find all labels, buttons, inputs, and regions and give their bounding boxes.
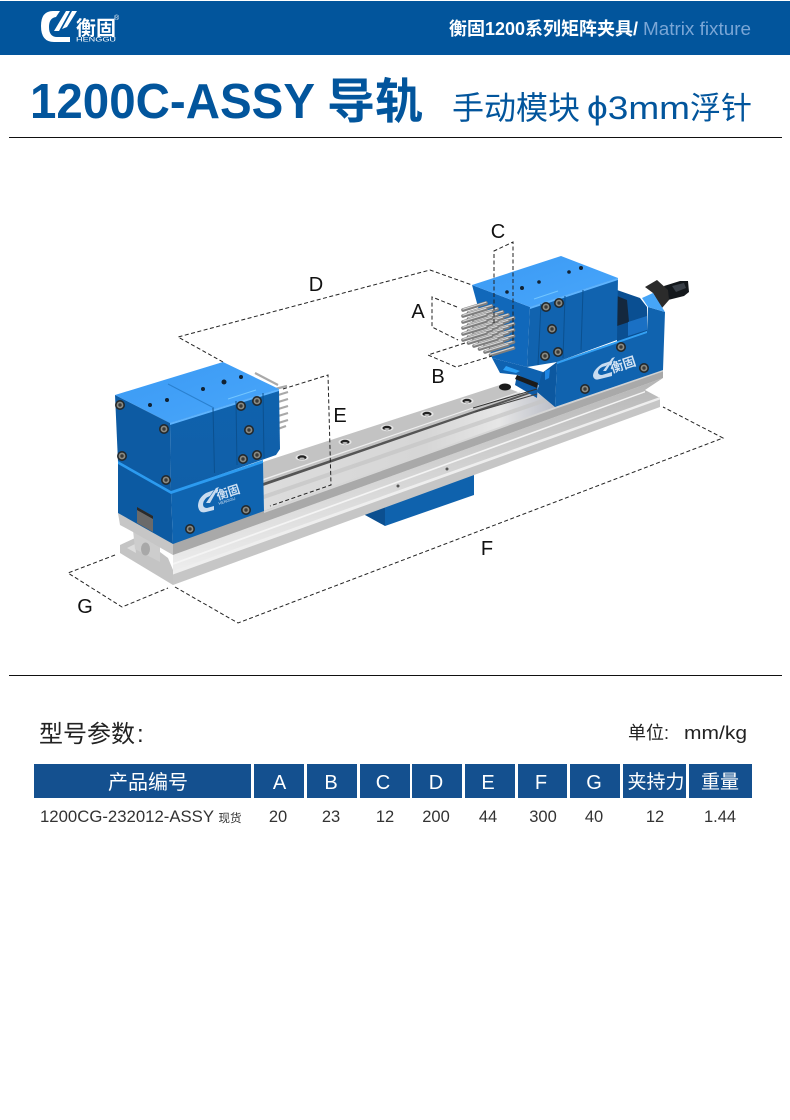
bottom blue bracket <box>365 470 474 526</box>
table header labels: G <box>586 772 602 794</box>
dimension labels: B <box>431 366 445 388</box>
table data row: 12 <box>646 808 664 826</box>
subtitle: 浮针 <box>690 91 752 126</box>
right clamp module <box>472 256 689 412</box>
unit note: 单位: <box>628 723 669 743</box>
dimension B <box>428 343 492 367</box>
table data row: 23 <box>322 808 340 826</box>
logo: HENGGU <box>76 36 116 44</box>
table header labels: D <box>429 772 443 794</box>
product diagram: rail and two clamp modules <box>115 256 689 585</box>
right module connector <box>645 280 689 308</box>
subtitle: ϕ3mm <box>587 90 690 126</box>
subtitle <box>452 90 752 126</box>
dimension labels: G <box>77 596 93 618</box>
subtitle: 手动模块 <box>452 90 580 126</box>
table data row: 12 <box>376 808 394 826</box>
right module logo: 衡固 <box>608 354 638 376</box>
table header labels <box>108 771 739 794</box>
section heading: 型号参数: <box>39 721 144 748</box>
right module slider <box>515 375 538 398</box>
title: 1200C-ASSY <box>30 75 315 129</box>
left module pins <box>255 373 288 430</box>
table data row <box>40 808 736 826</box>
pin matrix <box>463 302 514 355</box>
header english caption: Matrix fixture <box>643 19 751 39</box>
table header labels: E <box>481 772 495 794</box>
table header labels: F <box>535 772 547 794</box>
rail holes <box>296 398 474 461</box>
extrusion end face <box>120 538 173 585</box>
parameter table <box>34 764 752 826</box>
header band <box>0 1 790 55</box>
right module lower block <box>537 362 557 407</box>
table header labels: A <box>273 772 287 794</box>
right module logo <box>593 354 638 380</box>
title: 导轨 <box>327 76 423 129</box>
dimension F <box>175 407 723 623</box>
table data row: 1200CG-232012-ASSY <box>40 808 214 826</box>
left module logo: 衡固 <box>214 481 242 503</box>
right module rear wall <box>617 290 647 342</box>
table header <box>34 764 752 798</box>
table header labels: 重量 <box>701 771 739 793</box>
right module under body <box>492 358 543 386</box>
unit note: mm/kg <box>684 723 747 743</box>
left clamp module <box>115 362 288 544</box>
dimension labels: E <box>333 405 347 427</box>
table data row: 200 <box>422 808 450 826</box>
table header labels: 产品编号 <box>108 771 188 794</box>
base extrusion <box>120 378 663 585</box>
table header labels: C <box>376 772 390 794</box>
dimension D <box>178 270 472 362</box>
logo: 衡固 <box>76 17 116 40</box>
dimension labels: D <box>309 274 323 296</box>
table data row: 1.44 <box>704 808 736 826</box>
dimension G <box>68 555 168 607</box>
table data row: 40 <box>585 808 603 826</box>
logo: ® <box>114 14 120 22</box>
guide rail plate <box>118 370 663 555</box>
left module logo <box>198 481 242 512</box>
table data row: 44 <box>479 808 497 826</box>
dimension labels <box>77 221 505 618</box>
table data row: 现货 <box>218 811 242 825</box>
dimension lines <box>68 242 723 623</box>
dimension labels: C <box>491 221 505 243</box>
table data row: 20 <box>269 808 287 826</box>
dimension C <box>494 242 513 343</box>
table header labels: B <box>324 772 338 794</box>
left module latch <box>137 507 153 532</box>
header caption: 衡固1200系列矩阵夹具/ <box>449 18 638 39</box>
table data row: 300 <box>529 808 557 826</box>
right module top face <box>472 256 618 307</box>
dimension labels: F <box>481 538 493 560</box>
logo <box>41 11 120 44</box>
dimension labels: A <box>411 301 425 323</box>
table header labels: 夹持力 <box>627 771 685 793</box>
right module side face <box>527 278 618 367</box>
dimension A <box>432 297 458 340</box>
left module logo: HENGGU <box>218 496 236 506</box>
dimension E <box>270 375 331 506</box>
right module left face <box>472 285 530 367</box>
